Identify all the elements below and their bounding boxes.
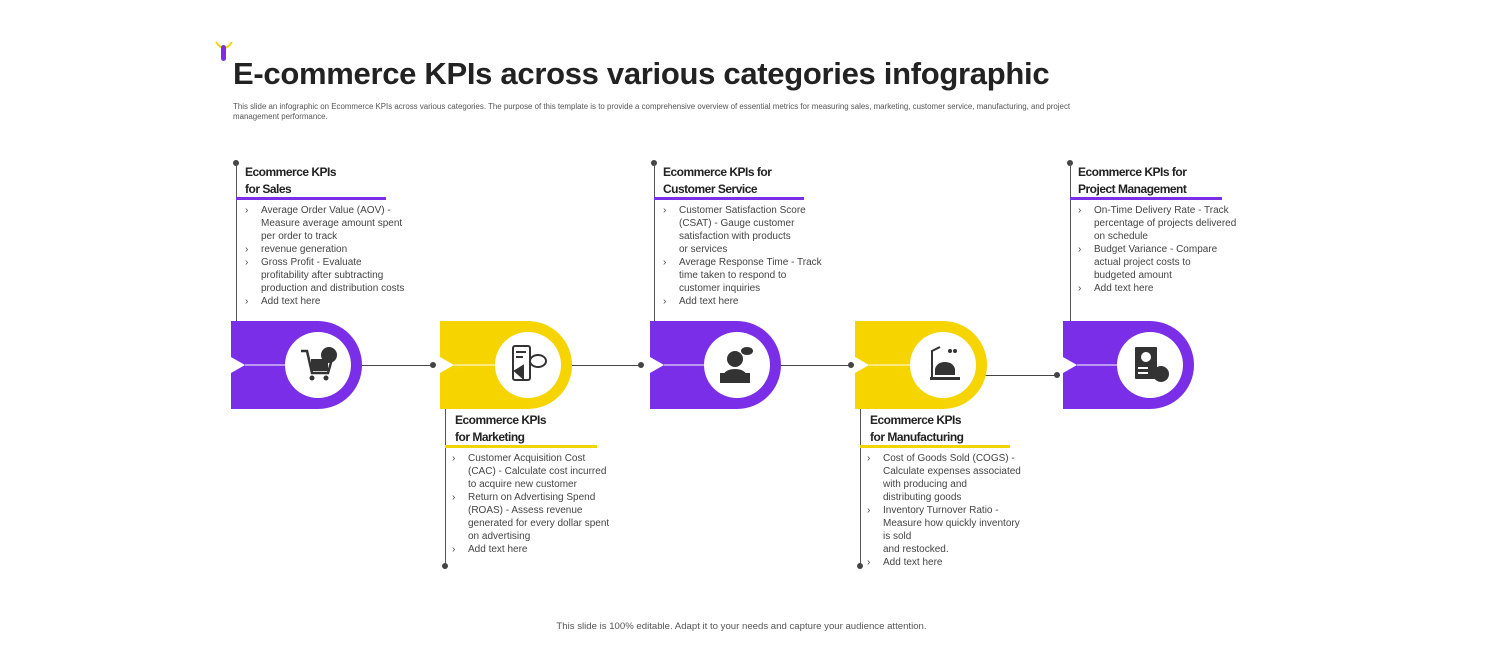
panel: manufacturing text: for Manufacturing <box>870 430 964 444</box>
panel: customer service text: Customer Satisfaction Score <box>679 205 806 216</box>
panel: customer service text: time taken to respond to <box>679 270 786 281</box>
panel: manufacturing text: distributing goods <box>883 492 961 503</box>
panel: sales text: per order to track <box>261 231 337 242</box>
panel: manufacturing text: Cost of Goods Sold (COGS) - <box>883 453 1015 464</box>
panel: project management text: on schedule <box>1094 231 1148 242</box>
panel: sales text: revenue generation <box>261 244 347 255</box>
panel: marketing text: for Marketing <box>455 430 525 444</box>
panel: marketing text: Ecommerce KPIs <box>455 413 546 427</box>
shape: marketing <box>440 321 572 409</box>
icon: support agent <box>720 347 753 383</box>
icon: phone megaphone <box>513 346 546 380</box>
panel: customer service text: (CSAT) - Gauge customer <box>679 218 794 229</box>
connectors <box>362 362 1060 378</box>
panel: sales text: Add text here <box>261 296 320 307</box>
panel: project management text: Project Management <box>1078 182 1186 196</box>
icon: car factory <box>930 347 960 380</box>
panel: manufacturing text: Ecommerce KPIs <box>870 413 961 427</box>
subtitle: This slide an infographic on Ecommerce KPIs across various categories. The purpose of this template is to provide a comprehensive overview of essential metrics for measuring sales, marketing, customer service, manufacturing, and project <box>233 102 1070 111</box>
footer: This slide is 100% editable. Adapt it to your needs and capture your audience attention. <box>556 621 927 632</box>
panel: sales text: Ecommerce KPIs <box>245 165 336 179</box>
panel: manufacturing text: is sold <box>883 531 911 542</box>
panel: sales text: Gross Profit - Evaluate <box>261 257 362 268</box>
panel: manufacturing text <box>857 409 1021 569</box>
panel: project management text: Add text here <box>1094 283 1153 294</box>
panel: customer service text: satisfaction with products <box>679 231 791 242</box>
panel: manufacturing text: and restocked. <box>883 544 949 555</box>
panel: manufacturing text: Calculate expenses associated <box>883 466 1021 477</box>
panel: sales text: for Sales <box>245 182 291 196</box>
shape: customer service <box>650 321 781 409</box>
panel: marketing text: Add text here <box>468 544 527 555</box>
panel: manufacturing text: Measure how quickly inventory <box>883 518 1020 529</box>
panel: sales text: production and distribution costs <box>261 283 404 294</box>
panel: customer service text <box>651 160 822 321</box>
shape: sales <box>231 321 362 409</box>
panel: project management text: actual project costs to <box>1094 257 1191 268</box>
shape: manufacturing <box>855 321 987 409</box>
panel: project management text: On-Time Delivery Rate - Track <box>1094 205 1229 216</box>
panel: marketing text: (ROAS) - Assess revenue <box>468 505 582 516</box>
panel: marketing text <box>442 409 610 569</box>
panel: sales text: profitability after subtracting <box>261 270 383 281</box>
panel: project management text: Ecommerce KPIs for <box>1078 165 1186 179</box>
panel: project management text: Budget Variance - Compare <box>1094 244 1217 255</box>
panel: marketing text: Customer Acquisition Cost <box>468 453 585 464</box>
title: E-commerce KPIs across various categories infographic <box>233 56 1049 91</box>
panel: manufacturing text: Add text here <box>883 557 942 568</box>
logo icon <box>215 42 233 61</box>
subtitle <box>233 102 1070 121</box>
panel: customer service text: Customer Service <box>663 182 757 196</box>
panel: project management text <box>1067 160 1236 321</box>
panel: customer service text: or services <box>679 244 727 255</box>
subtitle: management performance. <box>233 112 328 121</box>
panel: manufacturing text: Inventory Turnover Ratio - <box>883 505 999 516</box>
panel: marketing text: on advertising <box>468 531 530 542</box>
panel: marketing text: (CAC) - Calculate cost incurred <box>468 466 606 477</box>
panel: customer service text: Add text here <box>679 296 738 307</box>
panel: sales text: Average Order Value (AOV) - <box>261 205 391 216</box>
panel: sales text <box>233 160 404 321</box>
panel: project management text: budgeted amount <box>1094 270 1172 281</box>
panel: customer service text: customer inquiries <box>679 283 760 294</box>
panel: marketing text: to acquire new customer <box>468 479 577 490</box>
icon: cart <box>301 347 337 380</box>
panel: marketing text: generated for every dollar spent <box>468 518 609 529</box>
shape: project management <box>1063 321 1194 409</box>
panel: customer service text: Average Response Time - Track <box>679 257 822 268</box>
panel: manufacturing text: with producing and <box>883 479 967 490</box>
panel: marketing text: Return on Advertising Spend <box>468 492 595 503</box>
panel: sales text: Measure average amount spent <box>261 218 402 229</box>
panel: customer service text: Ecommerce KPIs for <box>663 165 771 179</box>
icon: clipboard gear <box>1135 347 1169 382</box>
panel: project management text: percentage of projects delivered <box>1094 218 1236 229</box>
